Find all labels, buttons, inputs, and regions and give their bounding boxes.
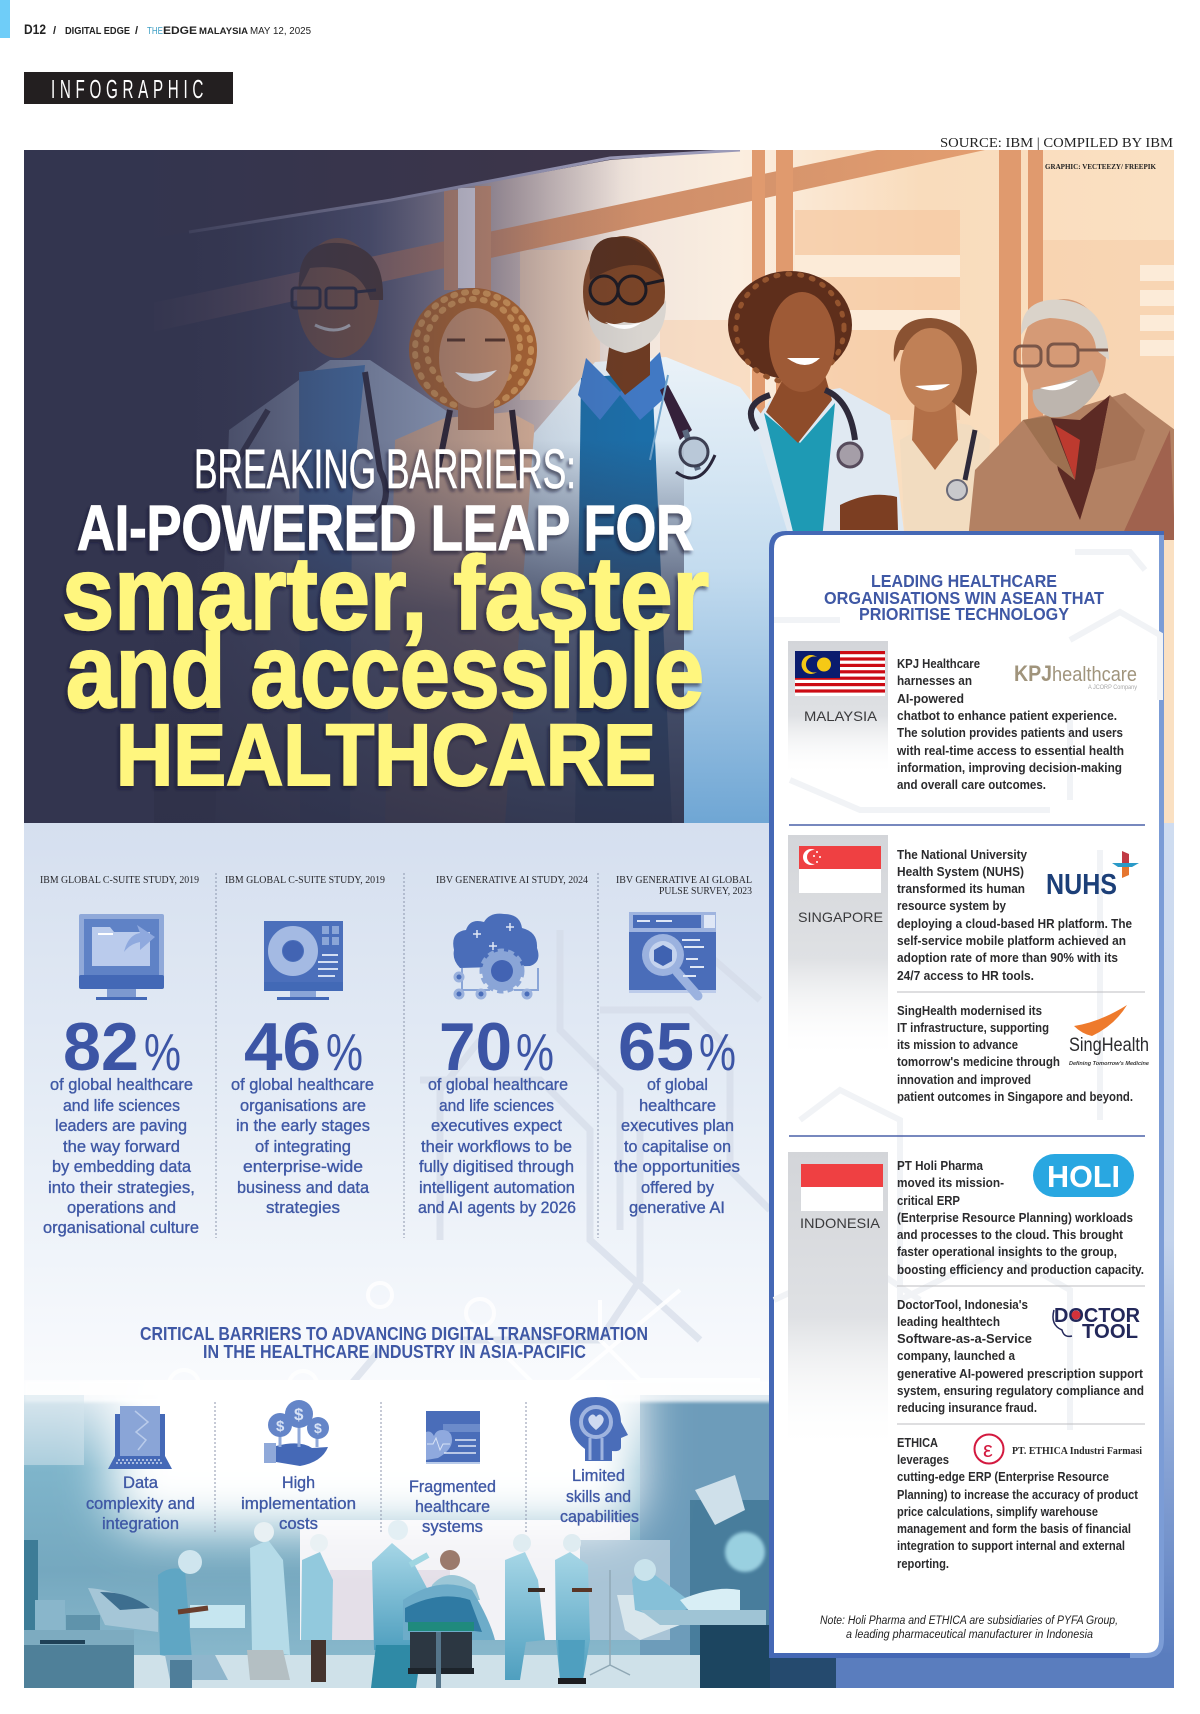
running header: / bbox=[53, 25, 56, 37]
NUHS text: adoption rate of more than 90% with its bbox=[897, 950, 1118, 965]
country block: Indonesia bbox=[788, 1152, 888, 1452]
KPJ text: information, improving decision-making bbox=[897, 760, 1122, 775]
icon: head with heart bbox=[570, 1397, 628, 1461]
panel: leading healthcare organisations bbox=[769, 531, 1164, 1658]
logo: KPJ healthcare: A JCORP Company bbox=[1088, 685, 1137, 691]
panel: hero illustration: GRAPHIC: VECTEEZY/ FREEPIK bbox=[1045, 162, 1156, 171]
stat: 65 percent: 65 bbox=[618, 1009, 694, 1085]
logo: SingHealth bbox=[1069, 1005, 1149, 1067]
section tag: infographic bbox=[24, 72, 233, 104]
source labels bbox=[40, 875, 752, 897]
stat: 70 percent: % bbox=[516, 1024, 554, 1082]
stat: 82 percent: into their strategies, bbox=[48, 1178, 195, 1197]
KPJ text bbox=[896, 656, 1124, 792]
stat: 70 percent: intelligent automation bbox=[419, 1178, 575, 1197]
patient on stretcher bbox=[403, 1584, 495, 1688]
KPJ text: KPJ Healthcare bbox=[897, 656, 980, 671]
source line: SOURCE: IBM | COMPILED BY IBM bbox=[940, 136, 1174, 151]
footnote: Note: Holi Pharma and ETHICA are subsidiaries of PYFA Group, bbox=[820, 1615, 1118, 1627]
icon: monitor with folder bbox=[79, 914, 164, 1000]
stat: 70 percent: fully digitised through bbox=[419, 1157, 574, 1176]
icon: hand with dollar coins: $ bbox=[314, 1420, 322, 1436]
person 3 bbox=[506, 236, 788, 823]
barrier labels: costs bbox=[279, 1514, 318, 1533]
Holi text: and processes to the cloud. This brought bbox=[897, 1227, 1124, 1242]
Ethica text: reporting. bbox=[897, 1556, 949, 1571]
barriers heading: IN THE HEALTHCARE INDUSTRY IN ASIA-PACIFIC bbox=[203, 1341, 586, 1362]
panel heading: ORGANISATIONS WIN ASEAN THAT bbox=[824, 588, 1104, 608]
running header: / bbox=[135, 25, 138, 37]
stat: 82 percent bbox=[43, 1009, 199, 1237]
logo: SingHealth: Defining Tomorrow's Medicine bbox=[1069, 1061, 1149, 1067]
barrier labels: healthcare bbox=[415, 1497, 490, 1516]
logo: KPJ healthcare: KPJ bbox=[1014, 661, 1052, 686]
running header: MALAYSIA bbox=[199, 26, 248, 37]
stat: 46 percent: organisations are bbox=[240, 1096, 366, 1115]
Holi text: boosting efficiency and production capacity. bbox=[897, 1262, 1144, 1277]
person 1 bbox=[224, 238, 447, 706]
stat: 65 percent: offered by bbox=[641, 1178, 714, 1197]
icon: heart record bbox=[426, 1411, 480, 1464]
Holi text: (Enterprise Resource Planning) workloads bbox=[897, 1210, 1133, 1225]
barrier labels: Data bbox=[123, 1473, 159, 1492]
person 6 bbox=[968, 299, 1175, 540]
window behind staff bbox=[300, 1520, 630, 1640]
logo: Holi bbox=[1033, 1154, 1134, 1197]
KPJ text: The solution provides patients and users bbox=[897, 725, 1123, 740]
KPJ text: harnesses an bbox=[897, 673, 972, 688]
barrier labels: Fragmented bbox=[409, 1477, 496, 1496]
ceiling bbox=[268, 150, 715, 218]
stat: 46 percent: business and data bbox=[237, 1178, 370, 1197]
title line: smarter, faster: smarter, faster bbox=[62, 536, 709, 652]
hero title bbox=[62, 437, 709, 804]
stat: 46 percent: enterprise-wide bbox=[243, 1157, 363, 1176]
title line: and accessible: and accessible bbox=[66, 614, 704, 730]
logo: DoctorTool: TOOL bbox=[1082, 1321, 1138, 1343]
staff with clipboard bbox=[555, 1534, 592, 1684]
flag: Malaysia bbox=[795, 651, 885, 696]
surgeon big gown bbox=[371, 1520, 480, 1688]
standing staff white gown bbox=[247, 1522, 290, 1680]
DoctorTool text: reducing insurance fraud. bbox=[897, 1400, 1037, 1415]
logo: SingHealth: SingHealth bbox=[1069, 1035, 1149, 1056]
stat: 65 percent: generative AI bbox=[629, 1198, 725, 1217]
running header: MAY 12, 2025 bbox=[250, 26, 311, 37]
panel heading bbox=[824, 571, 1104, 624]
navy overlays bbox=[154, 150, 612, 823]
panel: hospital scene bbox=[24, 1380, 770, 1688]
person 2 bbox=[390, 288, 537, 724]
Holi text: critical ERP bbox=[897, 1193, 960, 1208]
DoctorTool text: system, ensuring regulatory compliance and bbox=[897, 1383, 1144, 1398]
barrier labels: skills and bbox=[566, 1487, 631, 1506]
Holi text: PT Holi Pharma bbox=[897, 1158, 984, 1173]
logo: Ethica: PT. ETHICA Industri Farmasi bbox=[1012, 1446, 1142, 1457]
title line: Breaking Barriers: BREAKING BARRIERS: bbox=[194, 437, 576, 500]
stat: 65 percent: % bbox=[699, 1024, 736, 1082]
icon: cloud with gear bbox=[453, 914, 538, 998]
seated doctor bbox=[158, 1550, 228, 1688]
stat: 70 percent: of global healthcare bbox=[428, 1075, 568, 1094]
stat: 82 percent: operations and bbox=[67, 1198, 176, 1217]
icon: hand with dollar coins bbox=[264, 1400, 329, 1466]
stat: 82 percent: by embedding data bbox=[52, 1157, 192, 1176]
country block: Singapore bbox=[788, 835, 888, 1060]
panel: hero illustration bbox=[24, 150, 1175, 823]
SingHealth text: its mission to advance bbox=[897, 1037, 1018, 1052]
DoctorTool text bbox=[897, 1297, 1144, 1415]
logo: DoctorTool: DOCTOR bbox=[1054, 1305, 1141, 1327]
icon: monitor with donut chart bbox=[264, 921, 343, 1000]
stat: 65 percent: to capitalise on bbox=[624, 1137, 731, 1156]
window frames bbox=[202, 150, 1043, 445]
staff with tablet bbox=[505, 1534, 545, 1680]
stat: 46 percent: strategies bbox=[266, 1198, 340, 1217]
stat: 70 percent: and life sciences bbox=[439, 1096, 554, 1115]
stat: 82 percent: of global healthcare bbox=[50, 1075, 193, 1094]
KPJ text: and overall care outcomes. bbox=[897, 777, 1046, 792]
SingHealth text: tomorrow's medicine through bbox=[897, 1054, 1060, 1069]
stat: 65 percent: the opportunities bbox=[614, 1157, 740, 1176]
SingHealth text: innovation and improved bbox=[897, 1072, 1031, 1087]
DoctorTool text: DoctorTool, Indonesia's bbox=[897, 1297, 1028, 1312]
white glow bbox=[110, 1330, 640, 1530]
icon: hand with dollar coins: $ bbox=[276, 1418, 285, 1435]
logo: KPJ healthcare bbox=[1014, 661, 1137, 691]
barrier labels: integration bbox=[102, 1514, 179, 1533]
title line: healthcare: HEALTHCARE bbox=[116, 707, 656, 804]
KPJ text: AI-powered bbox=[897, 691, 964, 706]
running header bbox=[24, 21, 311, 37]
SingHealth text: patient outcomes in Singapore and beyond. bbox=[897, 1089, 1133, 1104]
SingHealth text: SingHealth modernised its bbox=[897, 1003, 1042, 1018]
person 5 bbox=[894, 318, 978, 501]
SingHealth text: IT infrastructure, supporting bbox=[897, 1020, 1049, 1035]
stat: 70 percent: executives expect bbox=[431, 1116, 562, 1135]
icon: browser with magnifier bbox=[629, 912, 716, 996]
country block: Malaysia: MALAYSIA bbox=[804, 708, 878, 724]
barriers heading: CRITICAL BARRIERS TO ADVANCING DIGITAL TRANSFORMATION bbox=[140, 1323, 648, 1344]
barrier dividers bbox=[215, 1402, 526, 1532]
Holi text bbox=[897, 1158, 1144, 1277]
bed left bbox=[88, 1588, 158, 1632]
source labels: PULSE SURVEY, 2023 bbox=[659, 886, 752, 897]
stat: 70 percent: and AI agents by 2026 bbox=[418, 1198, 576, 1217]
NUHS text: 24/7 access to HR tools. bbox=[897, 968, 1034, 983]
stat: 46 percent bbox=[231, 1009, 374, 1217]
stat: 46 percent: of integrating bbox=[255, 1137, 351, 1156]
panel: statistics background bbox=[24, 823, 774, 1413]
DoctorTool text: generative AI-powered prescription support bbox=[897, 1366, 1144, 1381]
country block: Singapore: SINGAPORE bbox=[798, 909, 883, 925]
barrier labels: Limited bbox=[572, 1466, 625, 1485]
barrier labels: capabilities bbox=[560, 1507, 639, 1526]
NUHS text: self-service mobile platform achieved an bbox=[897, 933, 1126, 948]
logo: Holi: HOLI bbox=[1047, 1159, 1120, 1194]
source labels: IBV GENERATIVE AI GLOBAL bbox=[616, 875, 752, 886]
Ethica text: Planning) to increase the accuracy of product bbox=[897, 1487, 1139, 1502]
DoctorTool text: leading healthtech bbox=[897, 1314, 1000, 1329]
logo: DoctorTool bbox=[1053, 1305, 1141, 1343]
running header: EDGE bbox=[163, 25, 197, 37]
stat: 82 percent: leaders are paving bbox=[55, 1116, 187, 1135]
NUHS text: The National University bbox=[897, 847, 1028, 862]
NUHS text: transformed its human bbox=[897, 881, 1025, 896]
stat: 65 percent: of global bbox=[647, 1075, 708, 1094]
stat: 65 percent: healthcare bbox=[639, 1096, 716, 1115]
logo: NUHS bbox=[1046, 851, 1139, 901]
flag: Singapore bbox=[799, 846, 881, 893]
stat: 46 percent: % bbox=[326, 1024, 363, 1082]
panel heading: LEADING HEALTHCARE bbox=[871, 571, 1057, 591]
icon: hand with dollar coins: $ bbox=[294, 1405, 304, 1424]
section tag: infographic: INFOGRAPHIC bbox=[51, 74, 208, 104]
DoctorTool text: Software-as-a-Service bbox=[897, 1331, 1032, 1346]
NUHS text bbox=[897, 847, 1132, 983]
footnote: a leading pharmaceutical manufacturer in Indonesia bbox=[846, 1629, 1093, 1641]
logo: NUHS: NUHS bbox=[1046, 869, 1117, 901]
icon: laptop with chart bbox=[108, 1406, 172, 1469]
stat: 46 percent: in the early stages bbox=[236, 1116, 370, 1135]
person 4 bbox=[728, 271, 905, 540]
stat: 82 percent: % bbox=[144, 1024, 181, 1082]
Ethica text bbox=[897, 1435, 1139, 1571]
stat: 82 percent: the way forward bbox=[63, 1137, 180, 1156]
NUHS text: Health System (NUHS) bbox=[897, 864, 1024, 879]
running header: D12 bbox=[24, 21, 46, 37]
barrier labels bbox=[86, 1466, 639, 1536]
Ethica text: ETHICA bbox=[897, 1435, 939, 1450]
stat: 82 percent: 82 bbox=[63, 1009, 139, 1085]
patient in chair bbox=[617, 1475, 770, 1688]
panel heading: PRIORITISE TECHNOLOGY bbox=[859, 604, 1069, 624]
barrier labels: systems bbox=[422, 1517, 483, 1536]
source labels: IBV GENERATIVE AI STUDY, 2024 bbox=[436, 875, 588, 886]
stat: 46 percent: of global healthcare bbox=[231, 1075, 374, 1094]
drip stand bbox=[590, 1570, 630, 1675]
barrier labels: implementation bbox=[241, 1494, 356, 1513]
Ethica text: leverages bbox=[897, 1452, 949, 1467]
Ethica text: integration to support internal and external bbox=[897, 1538, 1125, 1553]
logo: KPJ healthcare: healthcare bbox=[1052, 664, 1137, 686]
stat: 82 percent: organisational culture bbox=[43, 1218, 199, 1237]
running header: THE bbox=[147, 26, 163, 37]
title line: AI-powered leap for: AI-POWERED LEAP FOR bbox=[77, 492, 694, 564]
flag: Indonesia bbox=[801, 1164, 883, 1211]
KPJ text: chatbot to enhance patient experience. bbox=[897, 708, 1117, 723]
stat: 70 percent: their workflows to be bbox=[421, 1137, 572, 1156]
DoctorTool text: company, launched a bbox=[897, 1348, 1016, 1363]
NUHS text: resource system by bbox=[897, 898, 1007, 913]
source labels: IBM GLOBAL C-SUITE STUDY, 2019 bbox=[40, 875, 199, 886]
footnote bbox=[820, 1615, 1118, 1641]
stat: 65 percent bbox=[614, 1009, 740, 1217]
barrier labels: complexity and bbox=[86, 1494, 195, 1513]
source labels: IBM GLOBAL C-SUITE STUDY, 2019 bbox=[225, 875, 385, 886]
Holi text: faster operational insights to the group, bbox=[897, 1244, 1117, 1259]
logo: Ethica: ε bbox=[983, 1437, 993, 1462]
Ethica text: management and form the basis of financial bbox=[897, 1521, 1131, 1536]
right-hand dark wall bbox=[640, 1395, 769, 1655]
logo: Ethica bbox=[974, 1434, 1142, 1464]
stat: 65 percent: executives plan bbox=[621, 1116, 734, 1135]
country block: Indonesia: INDONESIA bbox=[800, 1215, 881, 1231]
SingHealth text bbox=[897, 1003, 1133, 1104]
building behind window bbox=[520, 210, 1174, 429]
NUHS text: deploying a cloud-based HR platform. The bbox=[897, 916, 1132, 931]
Ethica text: price calculations, simplify warehouse bbox=[897, 1504, 1098, 1519]
standing staff blue gown bbox=[301, 1534, 333, 1682]
cabinet left bbox=[24, 1540, 134, 1688]
floor bbox=[134, 1655, 700, 1688]
stat: 70 percent: 70 bbox=[439, 1009, 512, 1085]
Ethica text: cutting-edge ERP (Enterprise Resource bbox=[897, 1469, 1109, 1484]
stat: 46 percent: 46 bbox=[244, 1009, 321, 1085]
KPJ text: with real-time access to essential health bbox=[896, 743, 1124, 758]
Holi text: moved its mission- bbox=[897, 1175, 1004, 1190]
stat: 82 percent: and life sciences bbox=[63, 1096, 180, 1115]
blue strip right and bottom bbox=[770, 823, 1174, 1688]
barriers heading bbox=[140, 1323, 648, 1362]
running header: DIGITAL EDGE bbox=[65, 26, 130, 37]
barrier labels: High bbox=[282, 1473, 315, 1492]
country block: Malaysia bbox=[788, 641, 888, 776]
page marker tab bbox=[0, 0, 10, 38]
stat: 70 percent bbox=[418, 1009, 576, 1217]
